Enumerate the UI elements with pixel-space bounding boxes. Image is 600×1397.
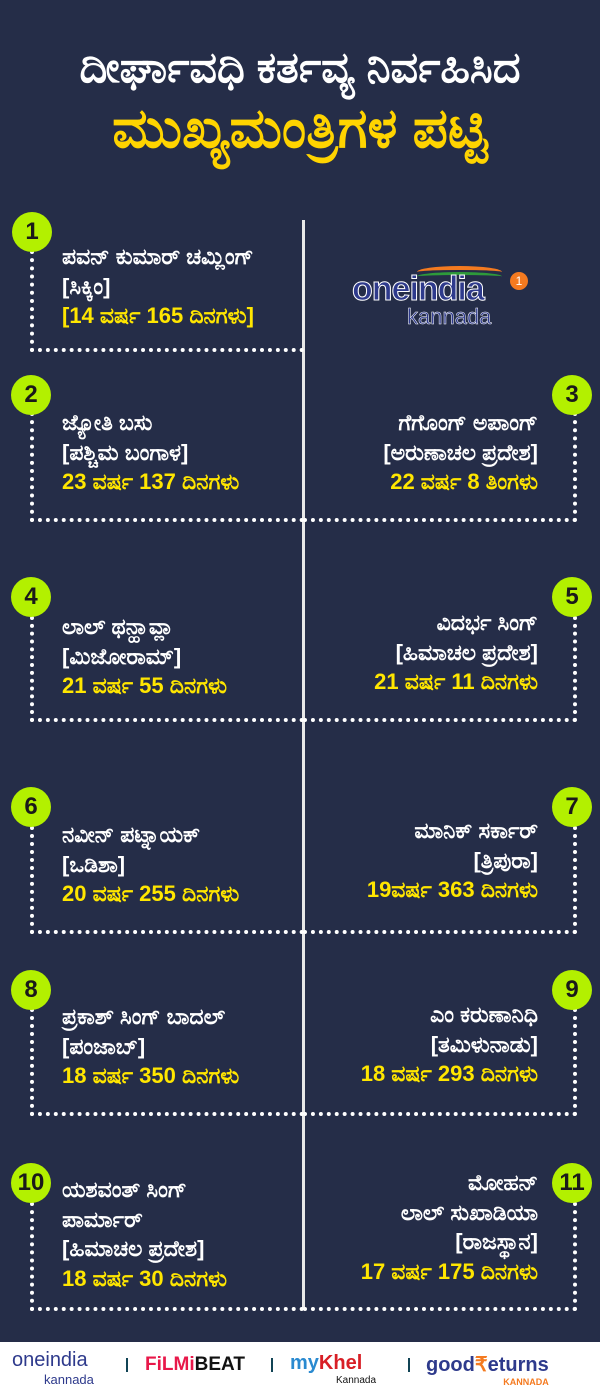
badge 4: 4 xyxy=(24,583,38,610)
entry 2: 23 ವರ್ಷ 137 ದಿನಗಳು xyxy=(62,469,239,494)
entry 11: 17 ವರ್ಷ 175 ದಿನಗಳು xyxy=(361,1258,538,1284)
title: ಮುಖ್ಯಮಂತ್ರಿಗಳ ಪಟ್ಟಿ xyxy=(112,97,488,159)
entry 1: ಪವನ್ ಕುಮಾರ್ ಚಮ್ಲಿಂಗ್ xyxy=(62,244,254,269)
logo: oneindia kannada xyxy=(352,266,528,329)
entry 1 xyxy=(62,244,254,328)
logo: goodreturns: good₹eturns xyxy=(426,1354,549,1376)
entry 8 xyxy=(61,1004,239,1088)
badge 8: 8 xyxy=(24,976,38,1003)
badge 8 xyxy=(11,970,51,1010)
entry 5: ವಿದರ್ಭ ಸಿಂಗ್ xyxy=(437,610,538,635)
entry 3: 22 ವರ್ಷ 8 ತಿಂಗಳು xyxy=(390,469,538,494)
badge 1 xyxy=(12,212,52,252)
logo: mykhel: Kannada xyxy=(336,1375,376,1386)
entry 7: 19ವರ್ಷ 363 ದಿನಗಳು xyxy=(367,877,538,902)
entry 11 xyxy=(361,1170,538,1284)
entry 10: ಪಾರ್ಮಾರ್ xyxy=(62,1206,143,1232)
badge 10: 10 xyxy=(18,1169,44,1196)
badge 6 xyxy=(11,787,51,827)
badge 5: 5 xyxy=(565,583,579,610)
entry 9 xyxy=(361,1002,538,1086)
badge 11: 11 xyxy=(559,1169,585,1196)
logo: oneindia: oneindia xyxy=(12,1349,88,1371)
badge 7: 7 xyxy=(565,793,579,820)
title: ದೀರ್ಘಾವಧಿ ಕರ್ತವ್ಯ ನಿರ್ವಹಿಸಿದ xyxy=(79,44,521,92)
entry 4 xyxy=(62,614,227,698)
entry 11: ಮೋಹನ್ xyxy=(468,1170,538,1195)
entry 10: [ಹಿಮಾಚಲ ಪ್ರದೇಶ] xyxy=(62,1236,204,1261)
entry 11: [ರಾಜಸ್ಥಾನ] xyxy=(455,1229,538,1254)
entry 8: 18 ವರ್ಷ 350 ದಿನಗಳು xyxy=(62,1063,239,1088)
logo: mykhel: myKhel xyxy=(290,1352,362,1374)
logo: oneindia kannada: 1 xyxy=(516,274,522,288)
entry 5: [ಹಿಮಾಚಲ ಪ್ರದೇಶ] xyxy=(396,640,538,664)
entry 6: [ಒಡಿಶಾ] xyxy=(62,852,125,876)
logo: oneindia kannada: kannada xyxy=(407,304,491,329)
entry 3: ಗೆಗೊಂಗ್ ಅಪಾಂಗ್ xyxy=(398,410,538,435)
badge 11 xyxy=(552,1163,592,1203)
entry 9: [ತಮಿಳುನಾಡು] xyxy=(431,1032,538,1056)
entry 4: ಲಾಲ್ ಥನ್ಹಾವ್ಲಾ xyxy=(62,614,173,639)
entry 10: ಯಶವಂತ್ ಸಿಂಗ್ xyxy=(62,1177,187,1202)
center divider xyxy=(302,220,305,1310)
badge 9 xyxy=(552,970,592,1010)
entry 8: [ಪಂಜಾಬ್] xyxy=(62,1034,145,1058)
entry 5 xyxy=(374,610,538,694)
badge 7 xyxy=(552,787,592,827)
badge 3 xyxy=(552,375,592,415)
entry 9: ಎಂ ಕರುಣಾನಿಧಿ xyxy=(430,1002,538,1027)
entry 3 xyxy=(383,410,538,494)
entry 11: ಲಾಲ್ ಸುಖಾಡಿಯಾ xyxy=(401,1200,538,1224)
badge 6: 6 xyxy=(24,793,38,820)
entry 3: [ಅರುಣಾಚಲ ಪ್ರದೇಶ] xyxy=(383,440,538,464)
entry 2 xyxy=(62,410,239,494)
badge 5 xyxy=(552,577,592,617)
logo: oneindia xyxy=(12,1349,94,1387)
logo: oneindia: kannada xyxy=(44,1372,94,1387)
badge 4 xyxy=(11,577,51,617)
entry 5: 21 ವರ್ಷ 11 ದಿನಗಳು xyxy=(374,669,538,694)
entry 10: 18 ವರ್ಷ 30 ದಿನಗಳು xyxy=(62,1266,227,1290)
logo: goodreturns: KANNADA xyxy=(503,1377,549,1387)
logo: oneindia kannada: oneindia xyxy=(352,270,484,308)
entry 6: 20 ವರ್ಷ 255 ದಿನಗಳು xyxy=(62,881,239,906)
entry 4: 21 ವರ್ಷ 55 ದಿನಗಳು xyxy=(62,673,227,698)
entry 6 xyxy=(62,822,239,906)
frames xyxy=(30,250,304,352)
logo: goodreturns xyxy=(426,1354,549,1387)
entry 1: [ಸಿಕ್ಕಿಂ] xyxy=(62,274,110,298)
badge 2: 2 xyxy=(24,381,38,408)
title xyxy=(79,44,521,170)
entry 7 xyxy=(367,818,538,902)
entry 10 xyxy=(62,1177,227,1290)
entry 2: [ಪಶ್ಚಿಮ ಬಂಗಾಳ] xyxy=(62,440,188,464)
entry 1: [14 ವರ್ಷ 165 ದಿನಗಳು] xyxy=(62,303,254,328)
badge 10 xyxy=(11,1163,51,1203)
badge 3: 3 xyxy=(565,381,579,408)
logo: mykhel xyxy=(290,1352,376,1386)
entry 2: ಜ್ಯೋತಿ ಬಸು xyxy=(62,410,152,435)
entry 9: 18 ವರ್ಷ 293 ದಿನಗಳು xyxy=(361,1061,538,1086)
entry 6: ನವೀನ್ ಪಟ್ನಾಯಕ್ xyxy=(62,822,200,847)
entry 7: ಮಾನಿಕ್ ಸರ್ಕಾರ್ xyxy=(414,818,538,843)
badge 2 xyxy=(11,375,51,415)
entry 7: [ತ್ರಿಪುರಾ] xyxy=(473,848,538,872)
badge 1: 1 xyxy=(25,218,39,245)
footer logos xyxy=(0,1342,600,1397)
entry 4: [ಮಿಜೋರಾಮ್] xyxy=(62,644,181,668)
entry 8: ಪ್ರಕಾಶ್ ಸಿಂಗ್ ಬಾದಲ್ xyxy=(62,1004,225,1029)
badge 9: 9 xyxy=(565,976,579,1003)
logo: filmibeat: FiLMiBEAT xyxy=(145,1354,245,1375)
